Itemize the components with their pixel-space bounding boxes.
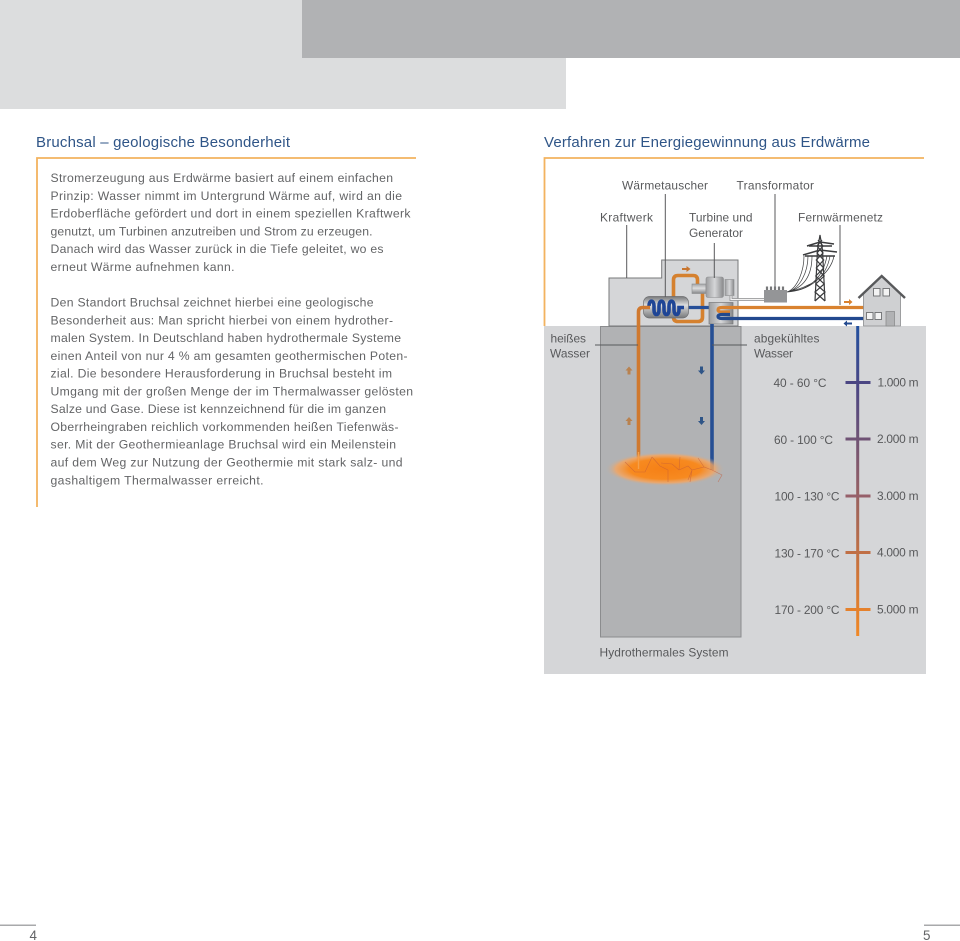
turbine and generator (692, 277, 734, 298)
depth scale (846, 326, 870, 636)
cable from generator to transformer (731, 296, 765, 300)
ground (544, 326, 926, 674)
labels: water: Wasser (754, 346, 793, 360)
arrow: flow to house (844, 299, 852, 305)
text block: paragraph 1: Prinzip: Wasser nimmt im Untergrund Wärme auf, wird an die (50, 189, 402, 203)
text block: paragraph 2: auf dem Weg zur Nutzung der Geothermie mit stark salz- und (50, 456, 402, 470)
text block: paragraph 1: Danach wird das Wasser zurück in die Tiefe geleitet, wo es (50, 242, 384, 256)
panel: geothermal diagram (544, 178, 926, 674)
temperature labels: 130 - 170 °C (774, 546, 840, 560)
leader lines (595, 194, 840, 345)
temperature labels: 40 - 60 °C (774, 376, 827, 390)
text block: paragraph 2: malen System. In Deutschland haben hydrothermale Systeme (50, 331, 401, 345)
labels: water: heißes (550, 332, 586, 346)
district heating return pipe (718, 314, 864, 318)
heading: Verfahren: Verfahren zur Energiegewinnung aus Erdwärme (544, 134, 870, 151)
footer rule right (924, 924, 960, 926)
hydrothermal column (600, 326, 741, 637)
labels: plant: Transformator (736, 178, 814, 192)
depth labels (877, 376, 919, 616)
text block: paragraph 1: genutzt, um Turbinen anzutreiben und Strom zu erzeugen. (50, 224, 372, 238)
hot pipe tip (638, 452, 640, 469)
arrow: plant flow (682, 266, 690, 272)
right panel frame (544, 158, 924, 326)
labels: plant: Kraftwerk (600, 211, 653, 225)
text block: paragraph 1 (50, 171, 411, 274)
text block: paragraph 2: Den Standort Bruchsal zeichnet hierbei eine geologische (50, 296, 374, 310)
arrows: downward flow (698, 366, 705, 425)
depth labels: 3.000 m (877, 489, 919, 503)
label: hydrothermal system: Hydrothermales System (600, 646, 729, 660)
text block: paragraph 2: Umgang mit der großen Menge der im Thermalwasser gelösten (50, 384, 413, 398)
text block: paragraph 2: einen Anteil von nur 4 % am gesamten geothermischen Poten- (50, 349, 408, 363)
left panel frame (37, 158, 416, 507)
depth labels: 5.000 m (877, 602, 919, 616)
text block: paragraph 2 (50, 296, 413, 487)
blue link between exchangers (683, 306, 710, 309)
temperature labels (774, 376, 840, 617)
orange loop inside plant (674, 276, 702, 322)
cold water pipe (710, 324, 714, 470)
labels: plant (600, 178, 883, 240)
footer rule left (0, 924, 36, 926)
text block: paragraph 1: Erdoberfläche gefördert und dort in einem speziellen Kraftwerk (50, 207, 411, 221)
depth labels: 2.000 m (877, 432, 919, 446)
district heating flow pipe (718, 308, 864, 312)
cable highlight (731, 296, 765, 300)
temperature labels: 170 - 200 °C (774, 603, 840, 617)
hot spot in the rock (605, 452, 725, 486)
power pylon (787, 235, 837, 301)
text block: paragraph 2: Salze und Gase. Diese ist kennzeichnend für die im ganzen (50, 402, 386, 416)
arrows: upward flow (626, 366, 632, 425)
depth labels: 1.000 m (878, 376, 919, 390)
text block: paragraph 2: Besonderheit aus: Man spricht hierbei von einem hydrother- (50, 313, 393, 327)
arrow: return from house (844, 320, 852, 326)
hot water pipe (638, 308, 650, 470)
second exchanger (709, 302, 733, 324)
house (858, 276, 905, 326)
heading: Bruchsal: Bruchsal – geologische Besonderheit (36, 134, 291, 151)
labels: plant: Generator (689, 226, 743, 240)
header band: dark grey block (302, 0, 960, 58)
text block: paragraph 2: zial. Die besondere Herausforderung in Bruchsal besteht im (50, 367, 392, 381)
text block: paragraph 2: ser. Mit der Geothermieanlage Bruchsal wird ein Meilenstein (50, 438, 396, 452)
blue coil (649, 301, 684, 314)
depth labels: 4.000 m (877, 546, 919, 560)
header band: light grey block (0, 0, 566, 109)
rock cracks (625, 457, 722, 482)
temperature labels: 100 - 130 °C (774, 490, 840, 504)
labels: water: Wasser (550, 346, 590, 360)
labels: plant: Fernwärmenetz (798, 211, 883, 225)
transformer (764, 286, 787, 302)
text block: paragraph 2: Oberrheingraben reichlich vorkommenden heißen Tiefenwäs- (50, 420, 398, 434)
temperature labels: 60 - 100 °C (774, 433, 833, 447)
labels: water: abgekühltes (754, 332, 820, 346)
labels: plant: Wärmetauscher (622, 178, 708, 192)
labels: plant: Turbine und (689, 211, 752, 225)
power plant building (609, 260, 738, 326)
text block: paragraph 1: erneut Wärme aufnehmen kann. (50, 260, 234, 274)
text block: paragraph 1: Stromerzeugung aus Erdwärme basiert auf einem einfachen (50, 171, 393, 185)
text block: paragraph 2: gashaltigem Thermalwasser erreicht. (50, 473, 264, 487)
heat exchanger (644, 296, 688, 318)
labels: water (550, 332, 820, 360)
